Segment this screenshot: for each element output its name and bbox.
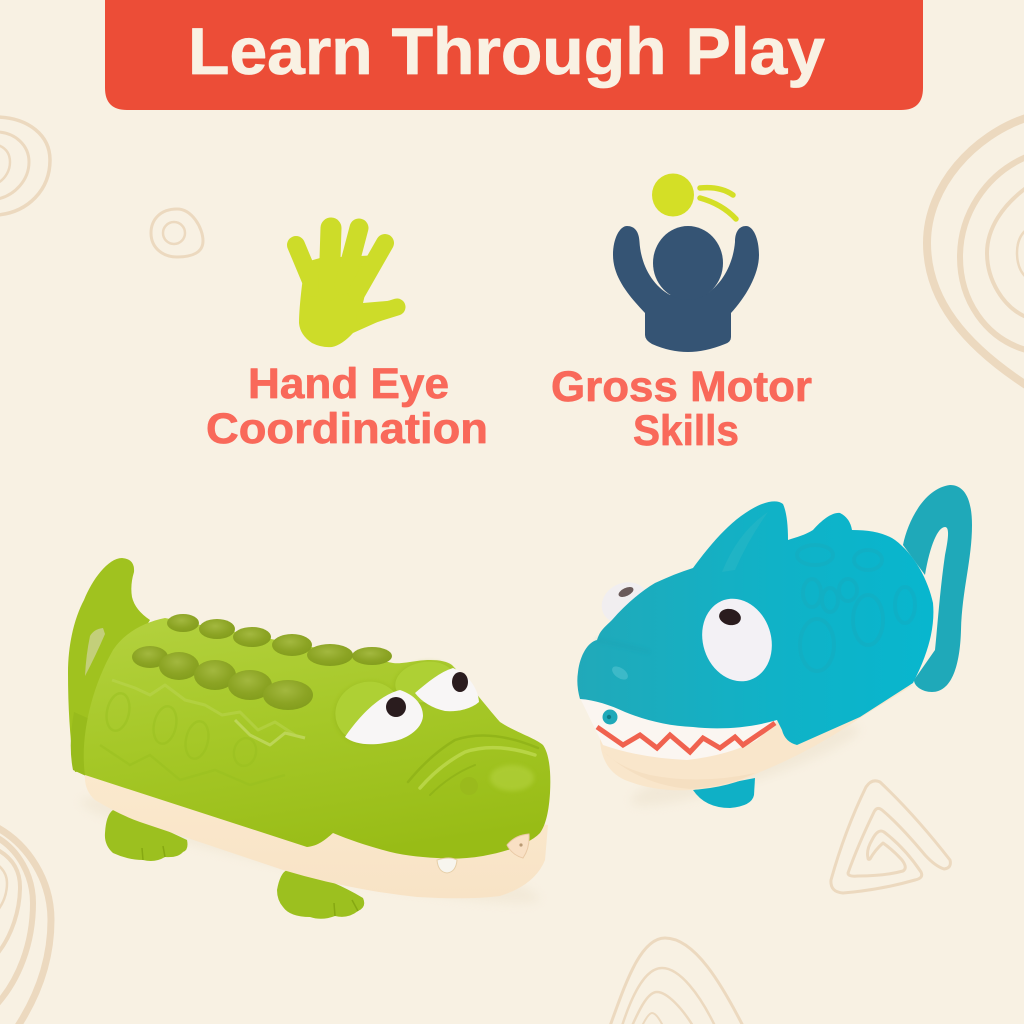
shark eye (692, 590, 782, 690)
shark belly (600, 685, 913, 790)
shark handle (903, 485, 972, 692)
croc tooth and nozzle (437, 834, 529, 873)
croc back bumps (167, 614, 392, 666)
crocodile water toy (68, 558, 550, 920)
croc front bumps (132, 646, 313, 710)
shark snout highlight (597, 640, 650, 652)
label: gross motor skills: Skills (633, 407, 739, 455)
croc snout ridges (408, 736, 538, 795)
shark fin highlight (722, 512, 768, 572)
croc tail handle (68, 558, 150, 776)
croc back foot (105, 810, 188, 861)
icon: hand (296, 228, 398, 347)
croc near eye (325, 672, 423, 754)
shark body (577, 501, 933, 745)
label: hand eye coordination (206, 360, 488, 453)
croc belly (85, 775, 548, 898)
shark nozzle (602, 710, 618, 724)
shark far eye (595, 575, 655, 631)
shark bottom fin (693, 778, 755, 808)
title text: Learn Through Play (188, 14, 825, 88)
croc body (84, 618, 550, 859)
croc body pattern (112, 680, 305, 745)
label: hand eye coordination: Coordination (206, 405, 488, 453)
icon: person catching ball (613, 174, 759, 352)
label: gross motor skills (551, 363, 812, 455)
label: gross motor skills: Gross Motor (551, 363, 812, 411)
shark mouth and teeth (580, 698, 780, 760)
croc front foot (277, 870, 364, 919)
shark water toy (577, 485, 972, 819)
label: hand eye coordination: Hand Eye (248, 360, 449, 408)
shark body texture (797, 545, 915, 671)
title banner (105, 0, 923, 110)
croc far eye (391, 657, 479, 711)
